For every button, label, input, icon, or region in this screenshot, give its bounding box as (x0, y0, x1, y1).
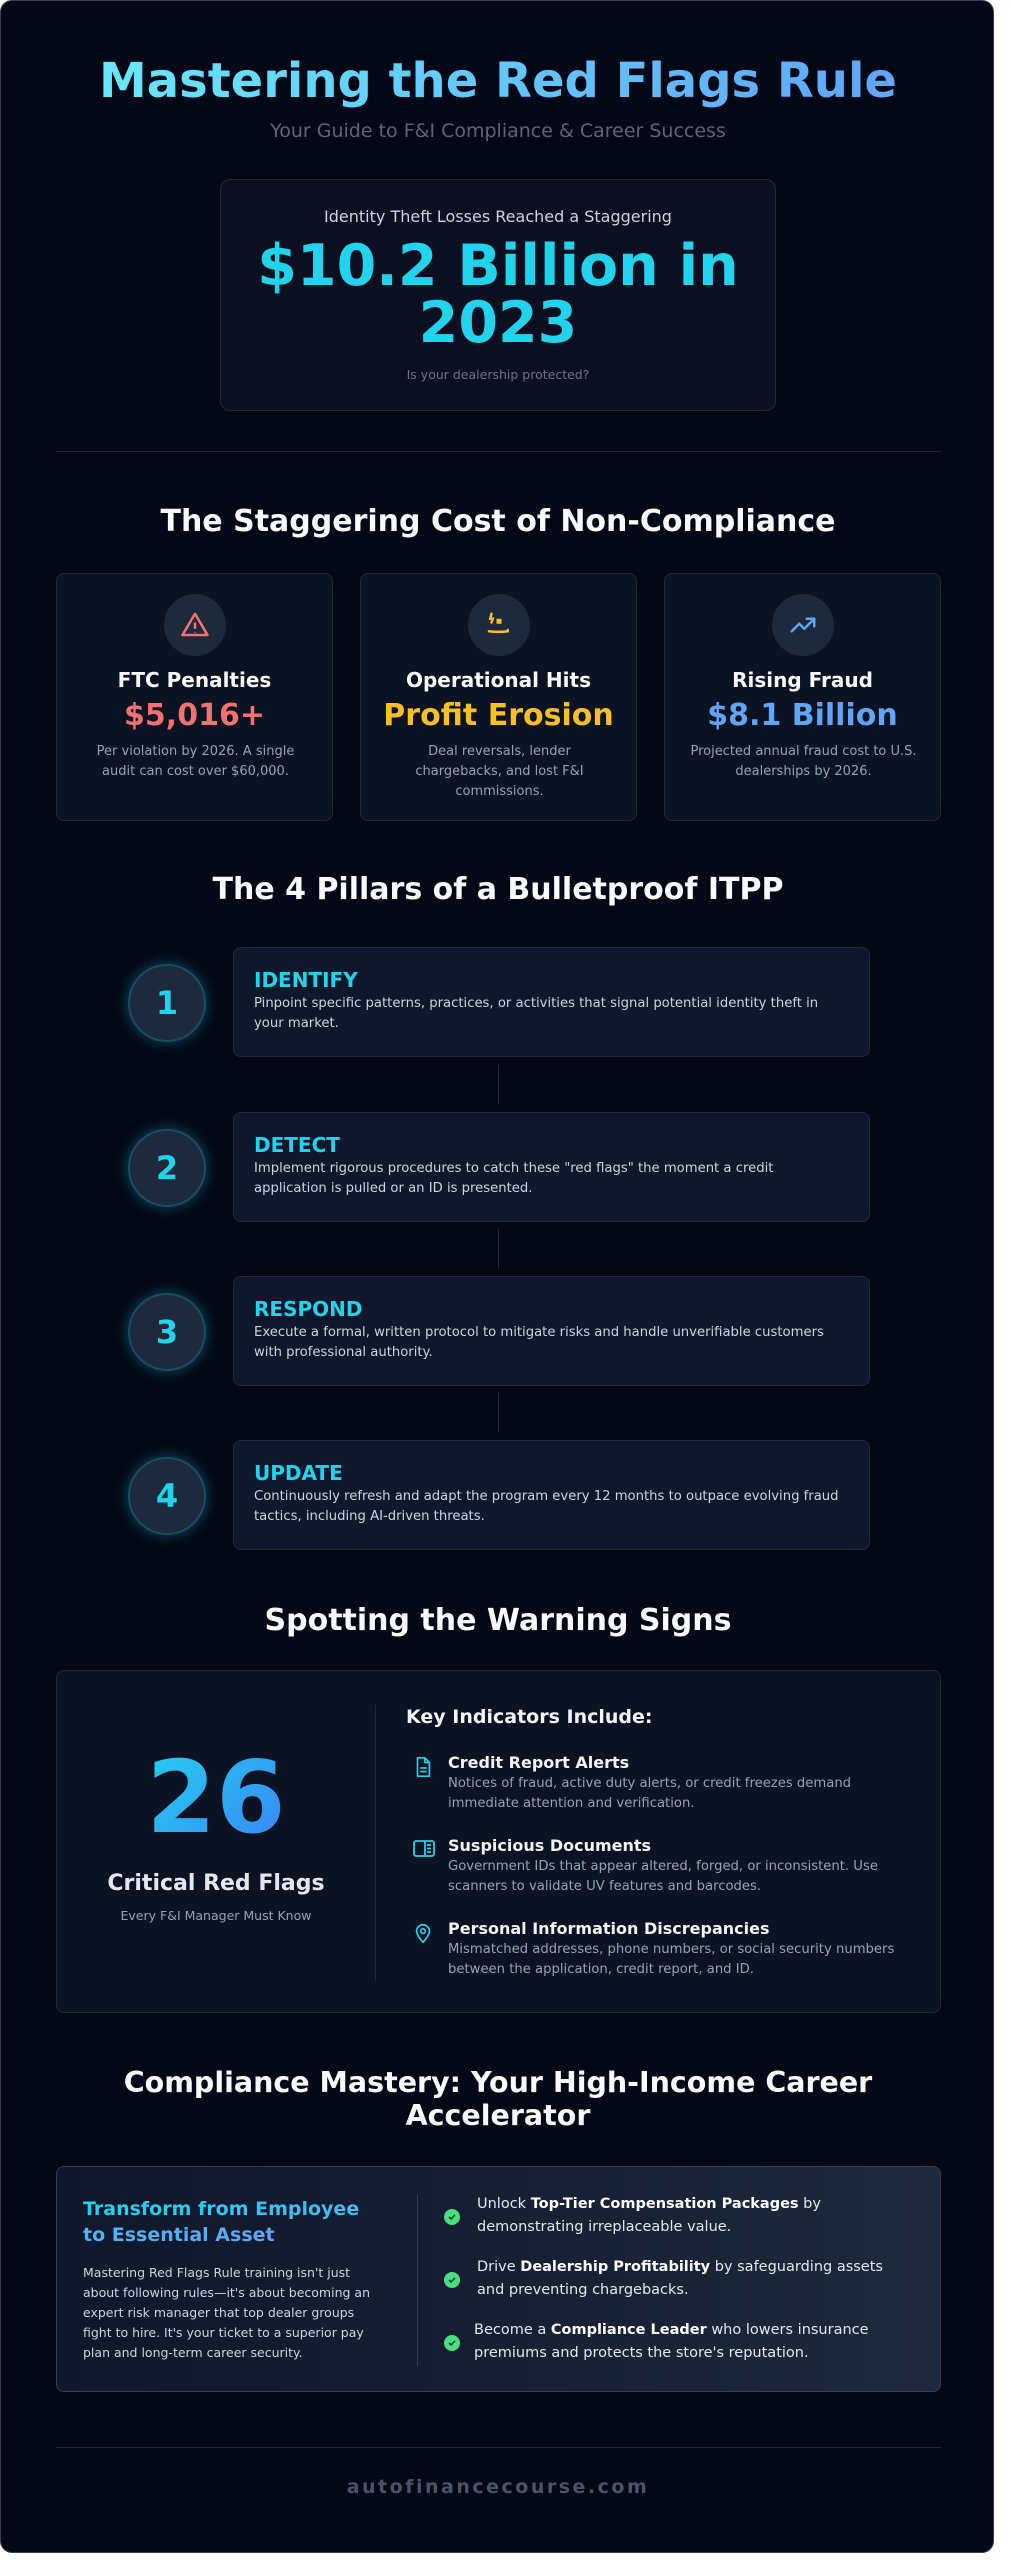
icon: erosion (468, 594, 530, 656)
panel: FTC penalties: FTC Penalties (118, 668, 271, 692)
stat label: Critical Red Flags (107, 1871, 325, 1896)
panel: operational hits: Operational Hits (406, 668, 591, 692)
title: Mastering the Red Flags Rule (99, 53, 897, 109)
indicator: credit report alerts: Credit Report Alerts (448, 1753, 629, 1772)
heading: warning signs: Spotting the Warning Signs (264, 1603, 731, 1638)
heading: career: Compliance Mastery: Your High-Income Career (124, 2066, 872, 2099)
hero stat box (220, 179, 776, 411)
benefit 2: Drive Dealership Profitability by safeguarding assets and preventing chargebacks. (477, 2259, 883, 2298)
indicator: personal info discrepancies: Mismatched addresses, phone numbers, or social security numbers between the application, credit report, and ID. (448, 1942, 894, 1977)
pillar 4: Continuously refresh and adapt the program every 12 months to outpace evolving fraud tactics, including AI-driven threats. (254, 1489, 839, 1524)
indicator: personal info discrepancies (416, 1919, 894, 1977)
panel: career accelerator (56, 2166, 941, 2392)
pillar 3 (120, 1276, 870, 1386)
indicator: personal info discrepancies: Personal Information Discrepancies (448, 1919, 769, 1938)
career paragraph: Mastering Red Flags Rule training isn't just about following rules—it's about becoming an expert risk manager that top dealer groups fight to hire. It's your ticket to a superior pay plan and long-term career security. (83, 2265, 370, 2360)
panel: warning signs: Every F&I Manager Must Know (121, 1908, 311, 1923)
hero number (257, 233, 739, 356)
pillar 2: Implement rigorous procedures to catch these "red flags" the moment a credit application is pulled or an ID is presented. (254, 1161, 773, 1196)
panel: rising fraud: Projected annual fraud cost to U.S. dealerships by 2026. (690, 744, 917, 779)
indicator: credit report alerts (416, 1753, 851, 1811)
heading: career (124, 2066, 872, 2132)
pillar 1: 1 (156, 984, 178, 1022)
pillar 4: 4 (156, 1477, 178, 1515)
indicator: suspicious documents (413, 1836, 878, 1894)
panel: operational hits: Deal reversals, lender chargebacks, and lost F&I commissions. (415, 744, 584, 799)
heading: cost: The Staggering Cost of Non-Compliance (160, 504, 836, 539)
indicator: credit report alerts: Notices of fraud, active duty alerts, or credit freezes demand immediate attention and verification. (448, 1776, 851, 1811)
footer url: autofinancecourse.com (347, 2476, 649, 2498)
panel: operational hits (360, 573, 637, 821)
pillar 1 (120, 947, 870, 1057)
panel: FTC penalties (56, 573, 333, 821)
benefit 1: Unlock Top-Tier Compensation Packages by demonstrating irreplaceable value. (477, 2196, 821, 2235)
benefit list (444, 2196, 883, 2361)
indicator: suspicious documents: Suspicious Documents (448, 1836, 651, 1855)
pillar 1: IDENTIFY (254, 968, 358, 992)
key indicators heading: Key Indicators Include: (406, 1706, 652, 1728)
icon: trend up (772, 594, 834, 656)
hero number: 2023 (419, 290, 577, 356)
panel: operational hits: Profit Erosion (383, 698, 614, 733)
panel: FTC penalties: Per violation by 2026. A single audit can cost over $60,000. (97, 744, 294, 779)
panel: rising fraud: Rising Fraud (732, 668, 873, 692)
pillar 4: UPDATE (254, 1461, 343, 1485)
hero question: Is your dealership protected? (407, 367, 589, 382)
subtitle: Your Guide to F&I Compliance & Career Success (270, 120, 726, 142)
pillar 3: RESPOND (254, 1297, 362, 1321)
benefit 3: Become a Compliance Leader who lowers insurance premiums and protects the store's reputation. (474, 2322, 869, 2361)
pillar 1: Pinpoint specific patterns, practices, or activities that signal potential identity theft in your market. (254, 996, 818, 1031)
panel: rising fraud: $8.1 Billion (707, 698, 898, 733)
panel: rising fraud (664, 573, 941, 821)
big stat 26: 26 (146, 1739, 286, 1856)
indicator: suspicious documents: Government IDs that appear altered, forged, or inconsistent. Use scanners to validate UV features and barcodes. (448, 1859, 878, 1894)
career heading: Transform from Employee to Essential Asset (83, 2198, 359, 2246)
pillar 3: Execute a formal, written protocol to mitigate risks and handle unverifiable customers with professional authority. (254, 1325, 824, 1360)
pillar 3: 3 (156, 1313, 178, 1351)
pillar 2: DETECT (254, 1133, 340, 1157)
pillar 4 (120, 1440, 870, 1550)
panel: warning signs (56, 1670, 941, 2013)
hero number: $10.2 Billion in (257, 233, 739, 299)
heading: career: Accelerator (406, 2099, 590, 2132)
hero lead text: Identity Theft Losses Reached a Staggering (324, 207, 672, 226)
pillar 2: 2 (156, 1149, 178, 1187)
icon: warning (164, 594, 226, 656)
pillar 2 (120, 1112, 870, 1222)
heading: pillars: The 4 Pillars of a Bulletproof ITPP (213, 872, 783, 907)
panel: FTC penalties: $5,016+ (124, 698, 265, 733)
